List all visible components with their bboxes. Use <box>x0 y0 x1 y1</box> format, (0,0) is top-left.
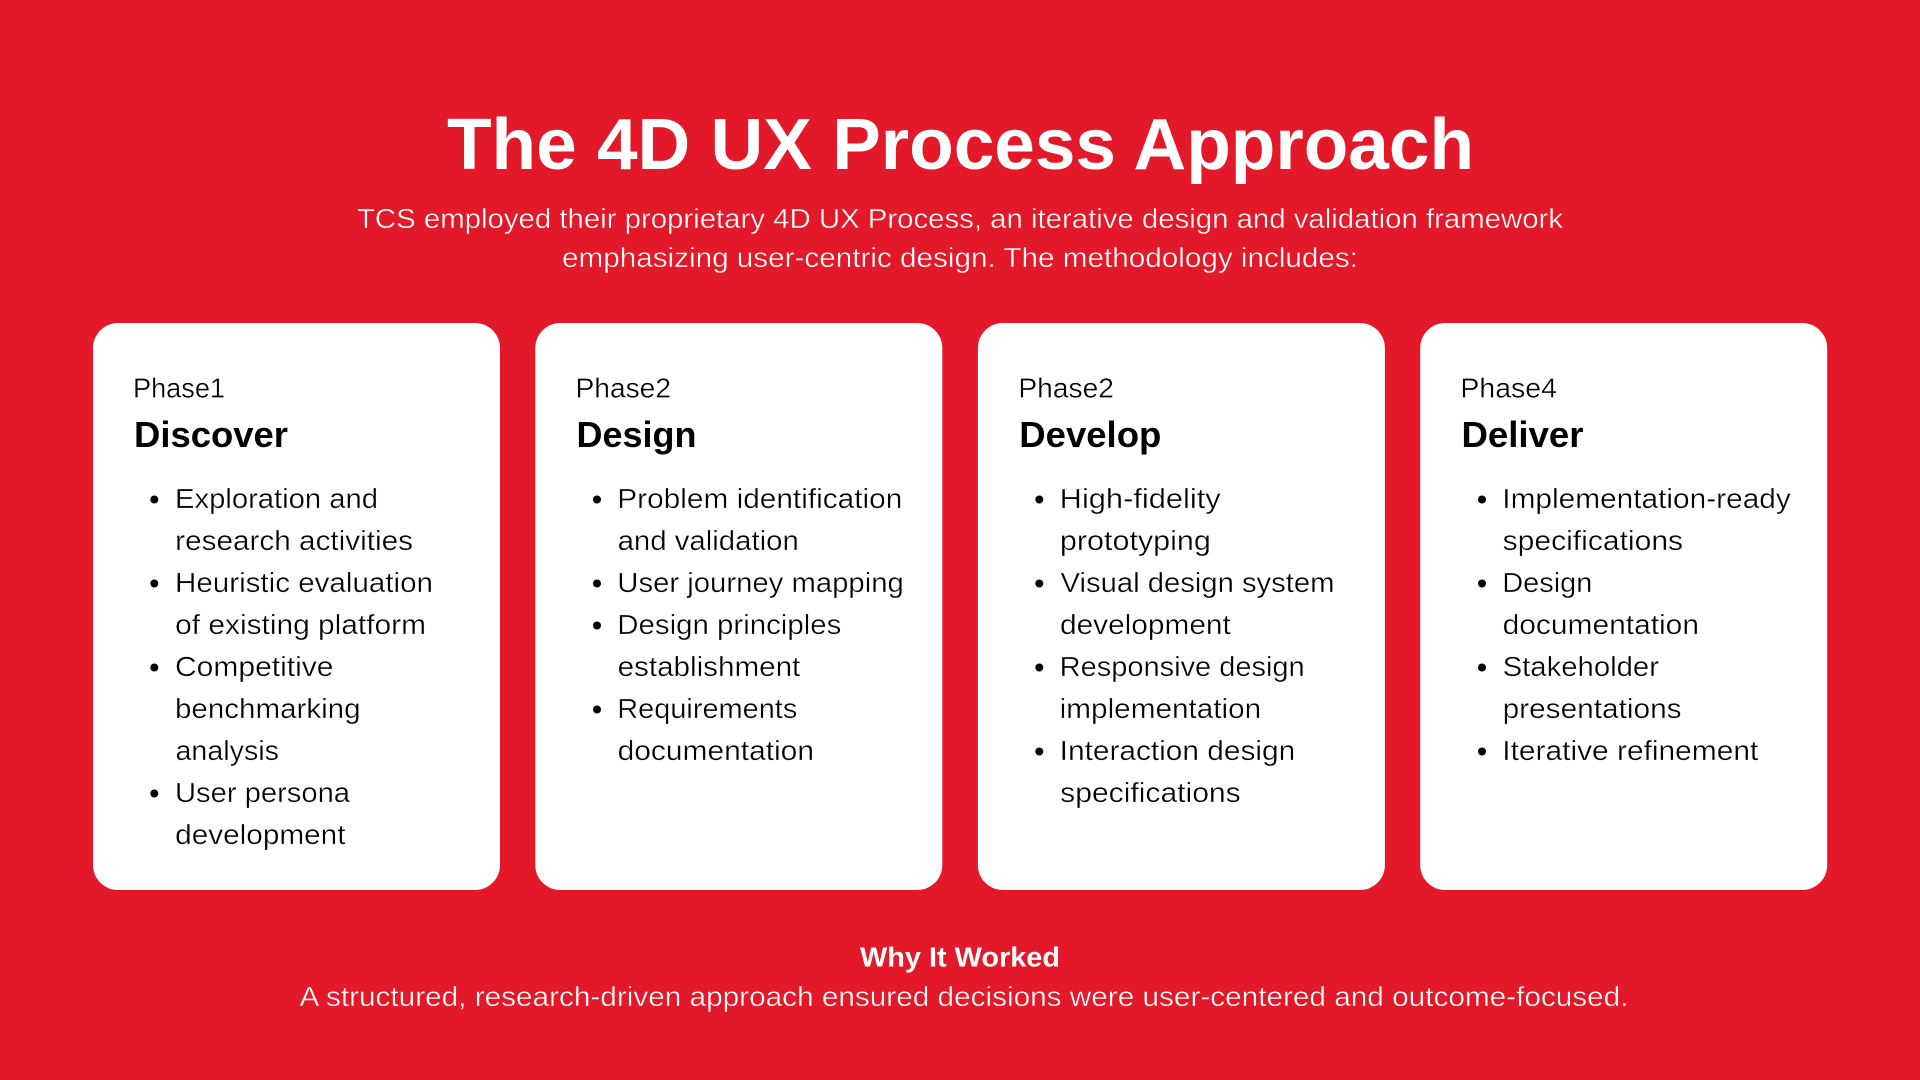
panel: phase 4 Deliver <box>1420 323 1827 890</box>
list item: Design principles <box>617 609 841 640</box>
list item: presentations <box>1503 693 1682 724</box>
list item: development <box>175 819 346 850</box>
list item: Requirements <box>617 693 797 724</box>
list item <box>593 609 841 682</box>
list item <box>1478 651 1682 724</box>
list item <box>593 693 814 766</box>
title: The 4D UX Process Approach <box>447 105 1474 185</box>
phase heading: Deliver <box>1462 414 1584 455</box>
list item: research activities <box>175 525 413 556</box>
why it worked description: A structured, research-driven approach ensured decisions were user-centered and outcome-focused. <box>300 981 1628 1012</box>
panel: phase 1 Discover <box>93 323 500 890</box>
phase heading: Design <box>576 414 696 455</box>
panel: phase 3 Develop <box>978 323 1385 890</box>
phase label: Phase4 <box>1460 373 1557 404</box>
list item: documentation <box>1503 609 1699 640</box>
list item: User journey mapping <box>617 567 904 598</box>
panel: phase 2 Design <box>535 323 942 890</box>
list item <box>1035 651 1305 724</box>
phase heading: Discover <box>134 414 288 455</box>
list item: Iterative refinement <box>1502 735 1759 766</box>
list item <box>150 483 413 556</box>
subtitle: emphasizing user-centric design. The methodology includes: <box>562 242 1358 273</box>
list item <box>1035 483 1221 556</box>
list item: specifications <box>1503 525 1683 556</box>
bullet list <box>150 483 433 850</box>
phase heading: Develop <box>1019 414 1161 455</box>
list item: Implementation-ready <box>1502 483 1791 514</box>
list item: and validation <box>618 525 799 556</box>
list item <box>150 651 360 766</box>
list item: User persona <box>175 777 350 808</box>
list item: documentation <box>618 735 814 766</box>
list item <box>1035 567 1334 640</box>
list item <box>150 777 350 850</box>
list item <box>593 483 902 556</box>
bullet list <box>1478 483 1791 766</box>
list item: prototyping <box>1060 525 1211 556</box>
list item: Design <box>1502 567 1592 598</box>
list item: Interaction design <box>1060 735 1295 766</box>
list item: Visual design system <box>1060 567 1334 598</box>
list item: High-fidelity <box>1060 483 1221 514</box>
list item: of existing platform <box>175 609 426 640</box>
list item: specifications <box>1060 777 1241 808</box>
phase label: Phase1 <box>133 373 225 404</box>
bullet list <box>593 483 904 766</box>
list item: establishment <box>618 651 801 682</box>
bullet list <box>1035 483 1334 808</box>
subtitle: TCS employed their proprietary 4D UX Process, an iterative design and validation framework <box>357 203 1564 234</box>
list item: Stakeholder <box>1503 651 1659 682</box>
phase label: Phase2 <box>576 373 671 404</box>
list item: Responsive design <box>1060 651 1305 682</box>
list item <box>150 567 433 640</box>
phase label: Phase2 <box>1018 373 1114 404</box>
list item <box>1478 483 1791 556</box>
list item: implementation <box>1060 693 1261 724</box>
list item: benchmarking <box>175 693 360 724</box>
list item: Heuristic evaluation <box>175 567 433 598</box>
list item <box>1035 735 1295 808</box>
list item <box>1478 567 1699 640</box>
list item: development <box>1060 609 1231 640</box>
subtitle <box>357 203 1564 273</box>
list item: Exploration and <box>175 483 378 514</box>
list item: Competitive <box>175 651 334 682</box>
why it worked heading: Why It Worked <box>860 942 1060 973</box>
list item: analysis <box>176 735 279 766</box>
list item: Problem identification <box>617 483 902 514</box>
